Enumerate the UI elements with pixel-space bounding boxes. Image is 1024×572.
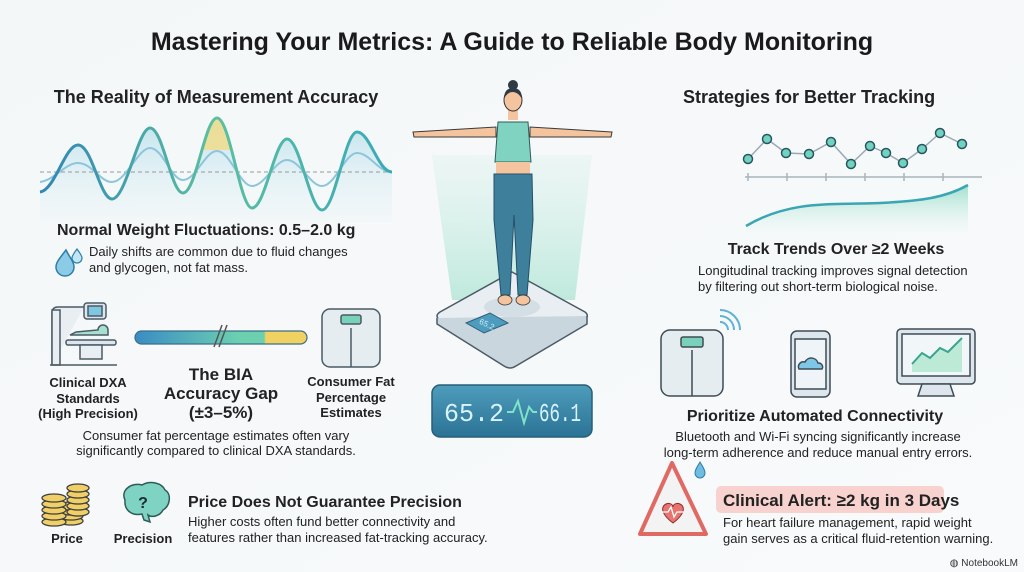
watermark: NotebookLM: ◍ NotebookLM xyxy=(950,558,1018,569)
chart: noisy data points and trend xyxy=(744,128,982,232)
label: BIA accuracy gap: Accuracy Gap xyxy=(164,384,278,403)
heading: price does not guarantee precision: Price Does Not Guarantee Precision xyxy=(188,494,462,511)
digital display readout xyxy=(432,385,592,437)
label: BIA accuracy gap: (±3–5%) xyxy=(189,403,253,422)
text: consumer estimates caption: significantly compared to clinical DXA standards. xyxy=(76,443,356,458)
label: clinical DXA: Standards xyxy=(56,391,120,406)
heading: prioritize connectivity: Prioritize Automated Connectivity xyxy=(687,408,943,425)
icon: water drops xyxy=(56,249,82,276)
text: longitudinal tracking xyxy=(698,263,968,294)
label: consumer fat percentage: Percentage xyxy=(316,390,386,405)
title: Mastering Your Metrics: A Guide to Reliable Body Monitoring xyxy=(151,28,873,56)
text: bluetooth syncing xyxy=(664,429,972,460)
heading: strategies for better tracking: Strategies for Better Tracking xyxy=(683,87,935,107)
label: BIA accuracy gap xyxy=(164,365,278,422)
digital display readout: 66.1 xyxy=(539,399,581,429)
text: higher costs: Higher costs often fund better connectivity and xyxy=(188,514,455,529)
icon: DXA scanner xyxy=(50,303,117,365)
icon: brain with question mark xyxy=(124,483,169,522)
text: longitudinal tracking: Longitudinal tracking improves signal detection xyxy=(698,263,968,278)
label: consumer fat percentage: Consumer Fat xyxy=(307,374,395,389)
text: daily shifts xyxy=(89,244,348,275)
icon: monitor with chart xyxy=(897,329,975,396)
label: price: Price xyxy=(51,531,83,546)
text: longitudinal tracking: by filtering out short-term biological noise. xyxy=(698,279,938,294)
icon: coins xyxy=(42,484,89,526)
digital display readout: 65.2 xyxy=(444,399,504,429)
label: precision: Precision xyxy=(114,531,172,546)
callout: clinical alert xyxy=(716,486,959,513)
icon: brain with question mark: ? xyxy=(138,495,148,512)
callout: clinical alert: Clinical Alert: ≥2 kg in 3 Days xyxy=(723,491,959,510)
text: higher costs: features rather than increased fat-tracking accuracy. xyxy=(188,530,488,545)
heading: normal weight fluctuations: Normal Weight Fluctuations: 0.5–2.0 kg xyxy=(57,222,355,239)
illustration: person on scale: 65.2 xyxy=(478,317,496,332)
text: daily shifts: and glycogen, not fat mass. xyxy=(89,260,248,275)
label: clinical DXA: (High Precision) xyxy=(38,406,138,421)
heading: track trends: Track Trends Over ≥2 Weeks xyxy=(728,241,944,258)
icon: phone with cloud xyxy=(791,331,830,397)
illustration: person on scale xyxy=(413,80,612,368)
label: clinical DXA: Clinical DXA xyxy=(49,375,127,390)
chart: weight fluctuation wave xyxy=(40,118,392,222)
label: consumer fat percentage xyxy=(307,374,395,420)
text: heart failure warning: For heart failure management, rapid weight xyxy=(723,515,972,530)
text: bluetooth syncing: long-term adherence and reduce manual entry errors. xyxy=(664,445,972,460)
icon: alert triangle with heart xyxy=(640,462,706,534)
label: BIA accuracy gap: The BIA xyxy=(189,365,253,384)
label: consumer fat percentage: Estimates xyxy=(320,405,382,420)
label: clinical DXA xyxy=(38,375,138,421)
text: heart failure warning xyxy=(723,515,993,546)
icon: smart scale with wifi xyxy=(661,310,740,396)
bar: BIA accuracy gap xyxy=(135,325,307,347)
text: consumer estimates caption: Consumer fat percentage estimates often vary xyxy=(83,428,350,443)
text: consumer estimates caption xyxy=(76,428,356,458)
text: bluetooth syncing: Bluetooth and Wi-Fi syncing significantly increase xyxy=(675,429,961,444)
text: higher costs xyxy=(188,514,488,545)
text: heart failure warning: gain serves as a critical fluid-retention warning. xyxy=(723,531,993,546)
heading: reality of measurement accuracy: The Reality of Measurement Accuracy xyxy=(54,87,378,107)
icon: consumer scale xyxy=(322,309,380,367)
text: daily shifts: Daily shifts are common due to fluid changes xyxy=(89,244,348,259)
